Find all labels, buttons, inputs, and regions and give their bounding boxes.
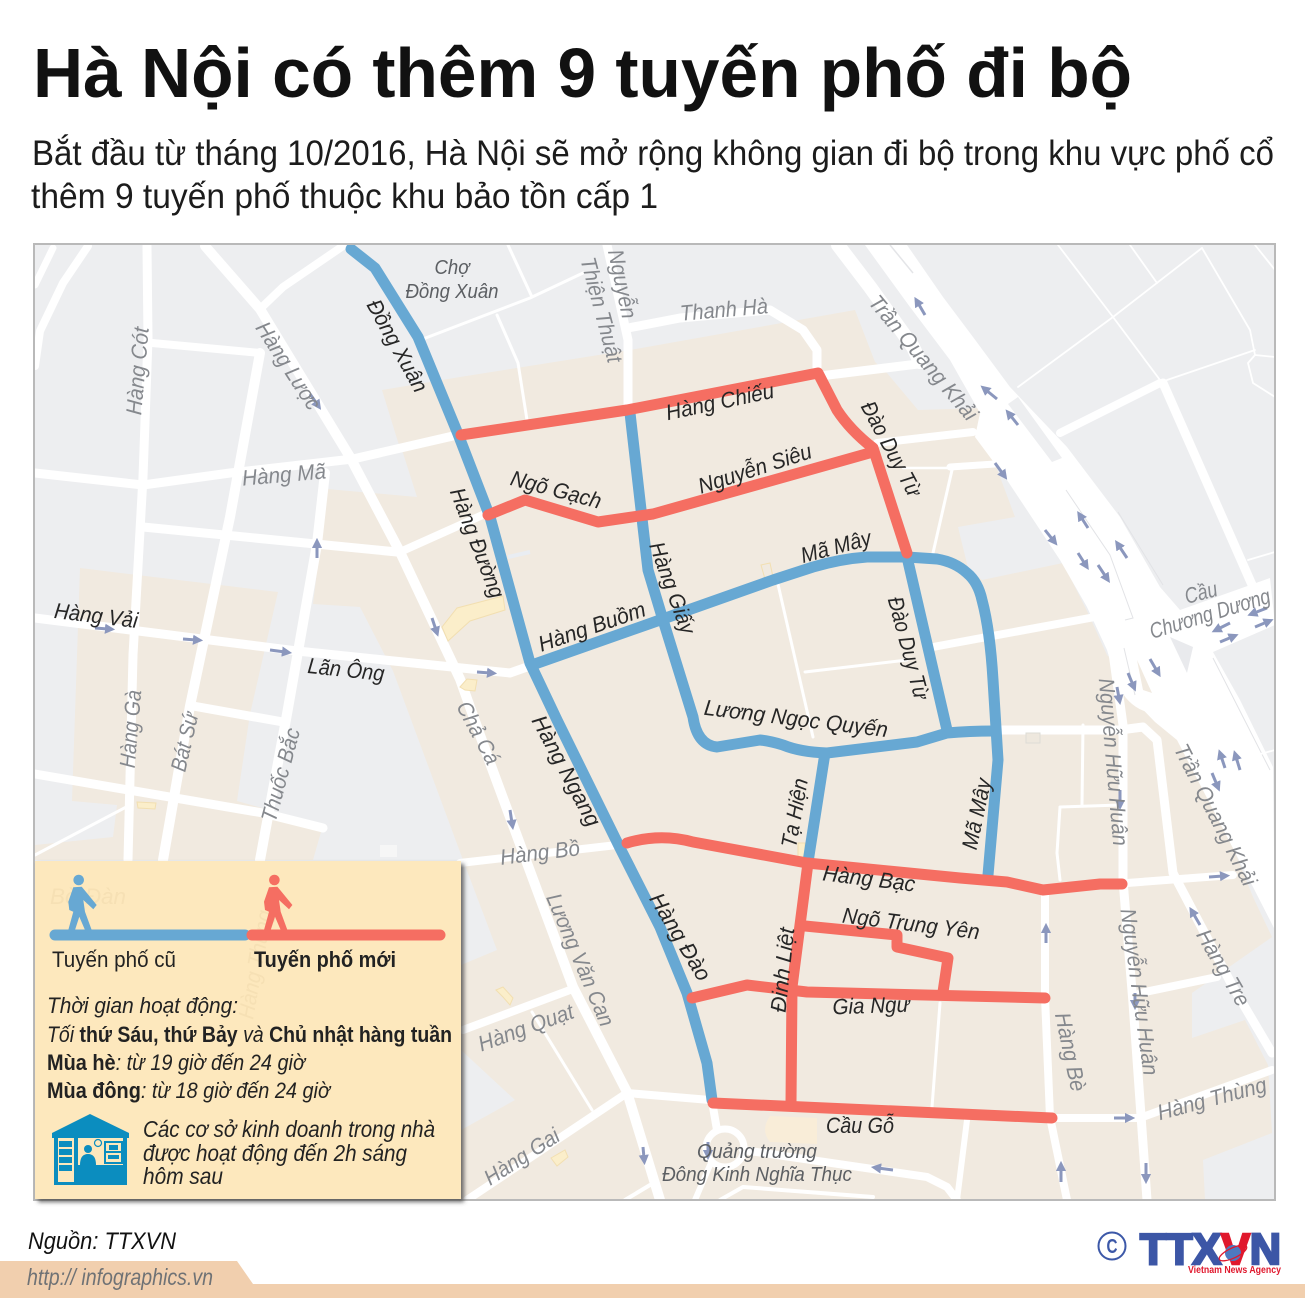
street label: Đào Duy Từ lower: Đào Duy Từ — [883, 594, 935, 704]
opening hours text: Mùa đông: từ 18 giờ đến 24 giờ — [47, 1078, 332, 1103]
street label: Hàng Mã: Hàng Mã — [241, 458, 327, 491]
copyright icon — [1098, 1232, 1126, 1260]
road network — [35, 245, 1275, 1200]
place label: Quảng trường Đông Kinh Nghĩa Thục — [662, 1141, 852, 1186]
footer band — [0, 1261, 1305, 1298]
old pedestrian streets (blue routes) — [351, 249, 998, 1100]
street label: Cầu Gỗ: Cầu Gỗ — [826, 1113, 894, 1138]
street label: Thuốc Bắc: Thuốc Bắc — [256, 725, 305, 824]
legend label: new streets: Tuyến phố mới — [254, 947, 396, 972]
website text: http:// infographics.vn — [27, 1264, 213, 1290]
legend panel — [35, 861, 461, 1199]
street label: Thiện Thuật: Thiện Thuật — [575, 254, 628, 366]
subtitle — [31, 134, 1274, 216]
street label: Đồng Xuân: Đồng Xuân — [362, 295, 433, 396]
street label: Chợ Đồng Xuân: Chợ — [434, 257, 471, 279]
logo: TTXVN: Vietnam News Agency — [1188, 1265, 1281, 1276]
street label: Tạ Hiện: Tạ Hiện — [776, 776, 813, 850]
logo: TTXVN: TTXVN — [1140, 1225, 1281, 1274]
street label: Hàng Gai: Hàng Gai — [479, 1122, 565, 1190]
street label: Hàng Cót: Hàng Cót — [121, 325, 154, 416]
street label: Trần Quang Khải upper: Trần Quang Khải — [864, 290, 984, 426]
beige old quarter areas — [35, 310, 1272, 1200]
business hours note — [143, 1116, 435, 1189]
street label: Hàng Buồm: Hàng Buồm — [535, 596, 649, 657]
faint street names under legend: Bờ Đàn — [50, 884, 126, 909]
street label: Lương Văn Can: Lương Văn Can — [541, 890, 620, 1030]
street label: Hàng Tre: Hàng Tre — [1191, 925, 1256, 1011]
street label: Chả Cá: Chả Cá — [451, 697, 505, 769]
street label: Hàng Ngang: Hàng Ngang — [527, 711, 606, 831]
small buildings — [137, 563, 1040, 1166]
legend label: old streets: Tuyến phố cũ — [52, 947, 176, 972]
faint street names under legend: Hàng Thùng — [233, 908, 277, 1021]
street label: Cầu: Cầu — [1182, 576, 1220, 609]
street label: Nguyễn Hữu Huân upper: Nguyễn Hữu Huân — [1094, 677, 1133, 847]
street label: Chương Dương: Chương Dương — [1146, 583, 1274, 644]
street label: Chợ Đồng Xuân — [406, 257, 498, 303]
street label: Ngõ Gạch: Ngõ Gạch — [508, 465, 604, 514]
street label: Đinh Liệt: Đinh Liệt — [766, 926, 799, 1014]
icon: blue pedestrian — [68, 875, 97, 930]
opening hours text: Thời gian hoạt động: — [47, 993, 238, 1018]
place label: Quảng trường Đông Kinh Nghĩa Thục: Đông Kinh Nghĩa Thục — [662, 1164, 852, 1186]
new pedestrian streets (red routes) — [461, 373, 1122, 1118]
street label: Gia Ngư: Gia Ngư — [832, 992, 912, 1019]
business hours note: được hoạt động đến 2h sáng — [143, 1140, 407, 1166]
street label: Nguyễn Siêu: Nguyễn Siêu — [695, 438, 815, 499]
street label: Hàng Chiếu: Hàng Chiếu — [663, 378, 776, 425]
street label: Hàng Thùng: Hàng Thùng — [1155, 1072, 1270, 1125]
opening hours text: Mùa hè: từ 19 giờ đến 24 giờ — [47, 1050, 307, 1075]
legend bar: new streets — [252, 930, 440, 940]
business hours note: Các cơ sở kinh doanh trong nhà — [143, 1116, 435, 1142]
street label: Hàng Bồ: Hàng Bồ — [499, 835, 581, 870]
legend bar: old streets — [55, 930, 245, 940]
source text: Nguồn: TTXVN — [28, 1228, 177, 1255]
street label: Hàng Lược: Hàng Lược — [251, 317, 326, 414]
street label: Thanh Hà: Thanh Hà — [679, 293, 769, 326]
street label: Nguyễn Hữu Huân lower: Nguyễn Hữu Huân — [1115, 907, 1164, 1077]
street label: Hàng Đào: Hàng Đào — [644, 888, 716, 985]
icon: red pedestrian — [264, 875, 292, 930]
opening hours text: Tối thứ Sáu, thứ Bảy và Chủ nhật hàng tuần — [47, 1022, 452, 1047]
icon: shop — [52, 1114, 129, 1185]
opening hours text — [47, 993, 452, 1103]
street label: Hàng Quạt: Hàng Quạt — [475, 998, 578, 1056]
place label: Quảng trường Đông Kinh Nghĩa Thục: Quảng trường — [697, 1141, 817, 1163]
title: Hà Nội có thêm 9 tuyến phố đi bộ — [33, 34, 1132, 112]
street label: Mã Mây upper: Mã Mây — [798, 525, 876, 568]
street label: Bát Sứ: Bát Sứ — [166, 708, 204, 774]
street label: Mã Mây lower: Mã Mây — [957, 774, 997, 852]
street label: Đào Duy Từ upper: Đào Duy Từ — [856, 397, 928, 502]
street label: Hàng Giấy: Hàng Giấy — [644, 538, 701, 639]
street label: Nguyễn: Nguyễn — [603, 247, 642, 321]
faint street names under legend — [50, 884, 277, 1021]
street label: Lãn Ông: Lãn Ông — [306, 653, 386, 686]
subtitle: thêm 9 tuyến phố thuộc khu bảo tồn cấp 1 — [31, 177, 658, 216]
business hours note: hôm sau — [143, 1163, 223, 1189]
street label: Ngõ Trung Yên: Ngõ Trung Yên — [841, 903, 981, 944]
traffic direction arrows — [95, 303, 1267, 1182]
Trần Quang Khải carriageway — [865, 245, 1275, 930]
street label: Hàng Đường: Hàng Đường — [445, 484, 510, 602]
street label: Hàng Bạc: Hàng Bạc — [821, 860, 917, 897]
map border — [34, 244, 1275, 1200]
street label: Lương Ngọc Quyến: Lương Ngọc Quyến — [703, 695, 889, 742]
street label: Trần Quang Khải lower: Trần Quang Khải — [1169, 740, 1262, 891]
street label: Chợ Đồng Xuân: Đồng Xuân — [406, 281, 498, 303]
map panel — [34, 244, 1275, 1200]
street label: Hàng Bè: Hàng Bè — [1050, 1010, 1091, 1094]
street label: Hàng Vải: Hàng Vải — [53, 598, 140, 633]
copyright icon: C — [1106, 1236, 1118, 1258]
street label: Hàng Gà: Hàng Gà — [115, 689, 146, 769]
